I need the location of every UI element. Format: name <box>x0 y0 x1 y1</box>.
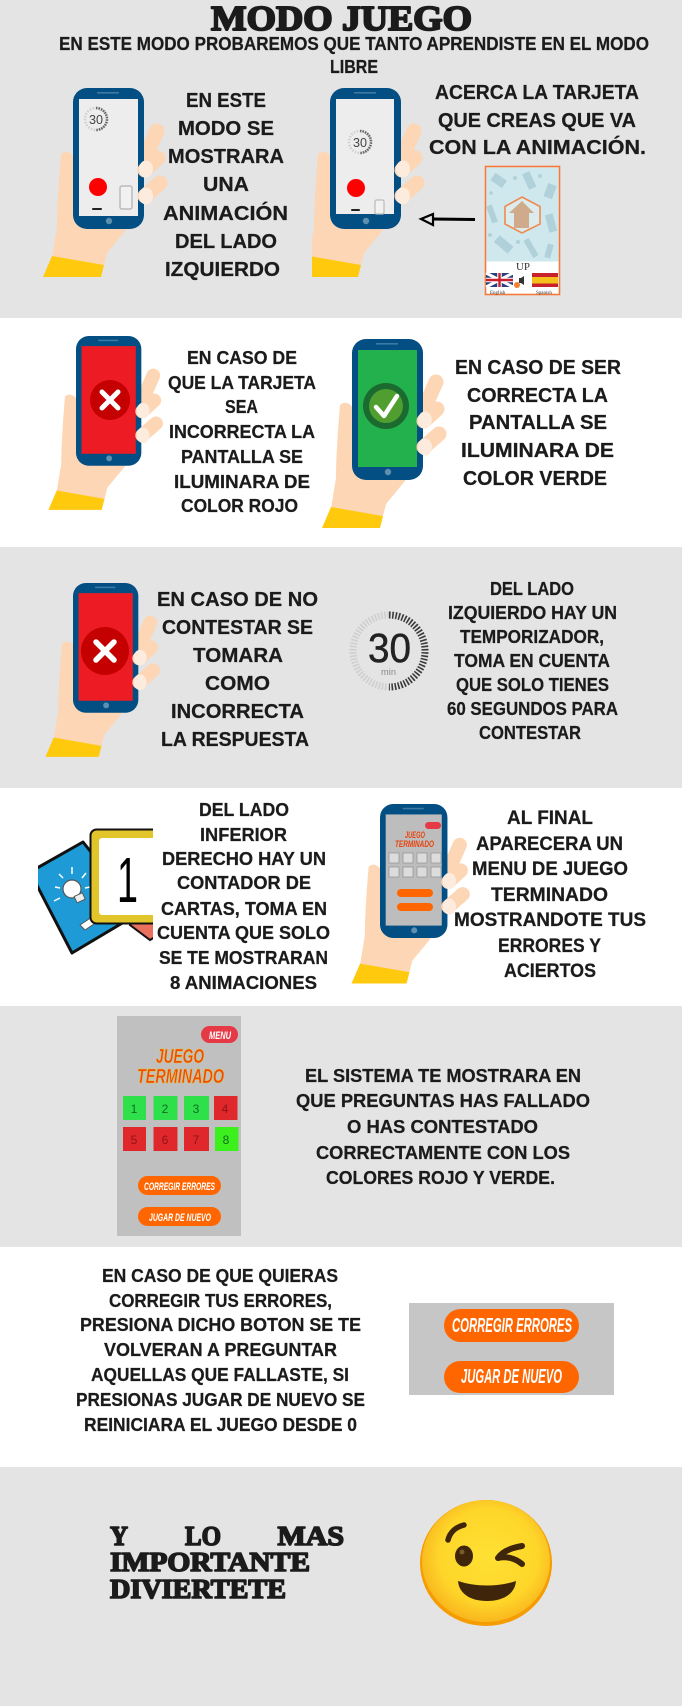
text: have fun: LO <box>185 1521 221 1551</box>
icon: hand holding phone with card: 30 <box>353 135 367 150</box>
text: card counter: DERECHO HAY UN <box>162 849 326 869</box>
text: timer explanation: TOMA EN CUENTA <box>454 651 610 671</box>
question result grid: 3 <box>193 1102 200 1116</box>
text: correct card: CORRECTA LA <box>467 385 608 407</box>
text: correct card: COLOR VERDE <box>463 468 607 490</box>
correct errors button: CORREGIR ERRORES <box>144 1181 215 1193</box>
text: correct errors explanation: PRESIONA DICHO BOTON SE TE <box>80 1315 361 1335</box>
text: animation on the left side: MOSTRARA <box>168 146 284 168</box>
text: incorrect card: PANTALLA SE <box>181 447 303 467</box>
text: incorrect card <box>168 348 316 516</box>
icon: stack of cards with counter <box>38 828 153 955</box>
text: correct errors explanation <box>76 1266 365 1435</box>
text: timer explanation: DEL LADO <box>490 579 574 599</box>
text: have fun: MAS <box>278 1521 344 1551</box>
text: timer explanation: CONTESTAR <box>479 723 581 743</box>
button: jugar de nuevo: JUGAR DE NUEVO <box>461 1366 562 1388</box>
text: final menu: ACIERTOS <box>504 961 596 982</box>
button: corregir errores: CORREGIR ERRORES <box>452 1315 572 1337</box>
text: incorrect card: EN CASO DE <box>187 348 297 368</box>
text: incorrect card: INCORRECTA LA <box>169 422 315 442</box>
play again button: JUGAR DE NUEVO <box>149 1212 211 1224</box>
text: have fun: IMPORTANTE <box>110 1547 310 1577</box>
text: results explanation <box>296 1065 590 1188</box>
text: card counter: INFERIOR <box>200 825 287 845</box>
text: no answer: LA RESPUESTA <box>161 729 309 751</box>
icon: phone with red screen and X <box>48 336 156 510</box>
text: correct card: ILUMINARA DE <box>461 440 614 462</box>
icon: phone with game over menu <box>352 804 463 984</box>
intro text <box>59 34 649 77</box>
text: card counter: CARTAS, TOMA EN <box>161 899 327 919</box>
text: card counter: CONTADOR DE <box>177 873 311 893</box>
text: have fun: Y <box>110 1521 128 1551</box>
panel: no answer and timer <box>0 547 682 788</box>
icon: hand holding phone with timer: 30 <box>89 112 103 127</box>
question result grid: 8 <box>223 1133 230 1147</box>
text: correct errors explanation: VOLVERAN A PREGUNTAR <box>104 1340 337 1360</box>
icon: winking emoji <box>420 1500 552 1626</box>
text: correct errors explanation: AQUELLAS QUE FALLASTE, SI <box>91 1365 349 1385</box>
text: animation on the left side: ANIMACIÓN <box>163 201 288 225</box>
panel: correct errors or restart <box>0 1247 682 1467</box>
panel: introduction <box>43 6 648 296</box>
text: final menu: APARECERA UN <box>476 834 623 855</box>
panel: closing message <box>0 1467 682 1706</box>
icon: phone with green screen and check <box>322 339 439 528</box>
intro text: EN ESTE MODO PROBAREMOS QUE TANTO APRENDISTE EN EL MODO <box>59 34 649 54</box>
text: final menu: ERRORES Y <box>498 936 601 957</box>
text: no answer: CONTESTAR SE <box>162 617 313 639</box>
icon: phone with game over menu: TERMINADO <box>395 839 434 849</box>
text: animation on the left side: DEL LADO <box>175 231 277 253</box>
text: timer explanation: TEMPORIZADOR, <box>460 627 604 647</box>
text: results explanation: EL SISTEMA TE MOSTRARA EN <box>305 1065 581 1086</box>
text: incorrect card: COLOR ROJO <box>181 496 298 516</box>
text: results explanation: CORRECTAMENTE CON LOS <box>316 1142 570 1163</box>
text: timer explanation: 60 SEGUNDOS PARA <box>447 699 618 719</box>
text: no answer: TOMARA <box>193 645 283 667</box>
text: card counter: 8 ANIMACIONES <box>170 973 317 993</box>
text: final menu <box>454 808 646 982</box>
icon: stack of cards with counter: 1 <box>117 844 138 916</box>
icon: flashcard UP: English <box>490 291 506 296</box>
icon: countdown timer 30: 30 <box>368 625 411 671</box>
menu button: MENU <box>209 1030 232 1042</box>
text: results explanation: COLORES ROJO Y VERDE. <box>326 1167 555 1188</box>
text: correct errors explanation: EN CASO DE QUE QUIERAS <box>102 1266 338 1286</box>
correct errors button <box>138 1176 221 1195</box>
text: no answer: COMO <box>205 673 270 695</box>
question result grid: 4 <box>222 1102 229 1116</box>
text: card counter: CUENTA QUE SOLO <box>157 923 330 943</box>
text: results explanation: O HAS CONTESTADO <box>347 1116 538 1137</box>
game over title: JUEGO <box>156 1046 204 1068</box>
question result grid: 5 <box>131 1133 138 1147</box>
question result grid: 6 <box>162 1133 169 1147</box>
text: final menu: MENU DE JUEGO <box>472 859 628 880</box>
icon: flashcard UP: UP <box>516 262 530 273</box>
text: card counter <box>157 800 330 993</box>
text: bring the card closer: ACERCA LA TARJETA <box>435 82 639 104</box>
title: MODO JUEGO <box>211 0 472 38</box>
icon: flashcard UP <box>486 166 560 296</box>
icon: flashcard UP: Spanish <box>536 291 552 296</box>
text: final menu: AL FINAL <box>507 808 593 829</box>
icon: hand holding phone with card <box>300 88 417 277</box>
text: timer explanation: IZQUIERDO HAY UN <box>448 603 617 623</box>
game over title: TERMINADO <box>137 1066 224 1088</box>
text: card counter: SE TE MOSTRARAN <box>159 948 328 968</box>
text: incorrect card: QUE LA TARJETA <box>168 373 316 393</box>
arrow <box>421 214 475 225</box>
panel: card counter and final menu <box>0 788 682 1006</box>
icon: phone with game over menu: JUEGO <box>405 830 425 840</box>
text: bring the card closer: QUE CREAS QUE VA <box>438 110 636 132</box>
text: animation on the left side <box>163 90 288 281</box>
button: corregir errores <box>444 1309 579 1342</box>
icon: countdown timer 30 <box>353 615 425 687</box>
question result grid: 1 <box>131 1102 138 1116</box>
text: timer explanation <box>447 579 618 743</box>
text: bring the card closer: CON LA ANIMACIÓN. <box>429 135 646 159</box>
question result grid <box>123 1096 238 1151</box>
question result grid: 7 <box>193 1133 200 1147</box>
text: results explanation: QUE PREGUNTAS HAS FALLADO <box>296 1090 590 1111</box>
icon: countdown timer 30: min <box>381 667 396 677</box>
text: final menu: TERMINADO <box>491 885 608 906</box>
text: final menu: MOSTRANDOTE TUS <box>454 910 646 931</box>
text: incorrect card: SEA <box>225 397 258 417</box>
buttons screenshot <box>409 1303 614 1395</box>
text: correct card: EN CASO DE SER <box>455 357 622 379</box>
panel: results screen <box>0 1006 682 1247</box>
intro text: LIBRE <box>330 57 378 77</box>
question result grid: 2 <box>162 1102 169 1116</box>
text: correct errors explanation: PRESIONAS JUGAR DE NUEVO SE <box>76 1390 365 1410</box>
text: incorrect card: ILUMINARA DE <box>174 472 310 492</box>
text: correct card <box>455 357 622 490</box>
text: have fun <box>110 1521 344 1604</box>
game over title <box>137 1046 224 1088</box>
text: animation on the left side: EN ESTE <box>186 90 266 112</box>
menu button <box>201 1026 238 1043</box>
text: timer explanation: QUE SOLO TIENES <box>456 675 609 695</box>
text: card counter: DEL LADO <box>199 800 289 820</box>
game over screenshot <box>117 1016 241 1236</box>
text: animation on the left side: MODO SE <box>178 118 274 140</box>
icon: hand holding phone with timer <box>43 88 160 277</box>
panel: wrong and correct card <box>0 318 682 547</box>
text: no answer: EN CASO DE NO <box>157 589 318 611</box>
text: animation on the left side: IZQUIERDO <box>165 259 280 281</box>
text: correct card: PANTALLA SE <box>469 412 607 434</box>
play again button <box>138 1207 221 1226</box>
text: no answer: INCORRECTA <box>171 701 304 723</box>
icon: phone with red screen, no answer <box>45 583 153 757</box>
text: correct errors explanation: REINICIARA EL JUEGO DESDE 0 <box>84 1415 357 1435</box>
text: correct errors explanation: CORREGIR TUS ERRORES, <box>109 1291 332 1311</box>
text: no answer <box>157 589 318 751</box>
text: animation on the left side: UNA <box>203 174 249 196</box>
button: jugar de nuevo <box>444 1361 579 1393</box>
text: bring the card closer <box>429 82 646 159</box>
text: have fun: DIVIERTETE <box>110 1574 286 1604</box>
